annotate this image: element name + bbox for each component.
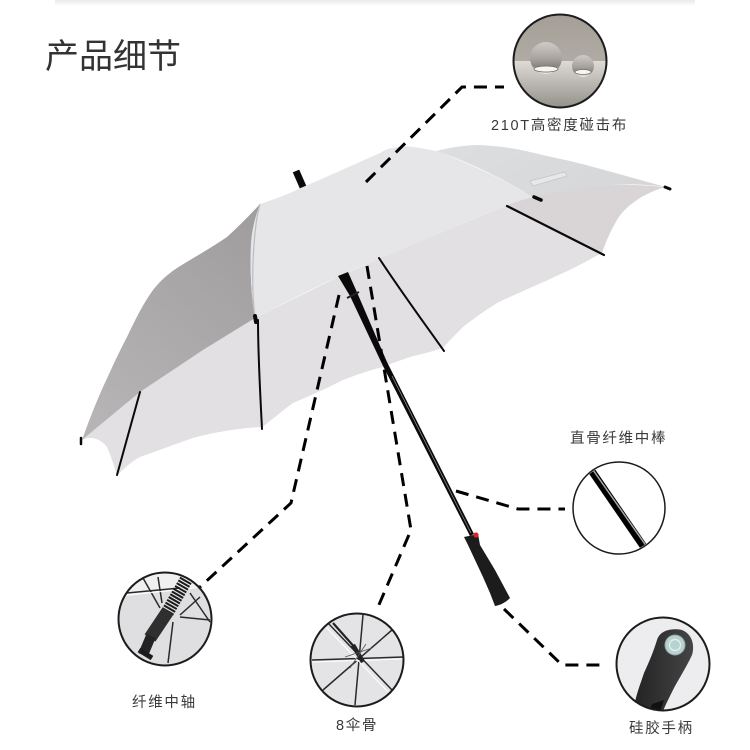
umbrella xyxy=(81,145,670,606)
detail circle: center axis xyxy=(115,570,215,670)
back panel top xyxy=(436,145,665,197)
label: eight ribs: 8伞骨 xyxy=(336,717,378,734)
top shadow band xyxy=(55,0,695,6)
label: shaft: 直骨纤维中棒 xyxy=(570,430,667,447)
title: 产品细节 xyxy=(45,38,181,76)
grip handle xyxy=(464,532,510,606)
canopy ribs xyxy=(81,187,670,475)
main front panel xyxy=(251,146,533,318)
back panel underside xyxy=(507,185,665,253)
detail circle: fiber shaft xyxy=(573,462,665,554)
top ferrule xyxy=(296,171,303,187)
seam highlight xyxy=(253,204,260,318)
dashed leader: ribs xyxy=(367,266,411,607)
center shaft xyxy=(338,272,474,536)
canopy label tag xyxy=(530,172,567,186)
detail circle: silicone grip xyxy=(615,616,711,712)
detail circle: eight ribs xyxy=(310,614,404,706)
label: center axis: 纤维中轴 xyxy=(132,694,197,711)
lower canopy underside xyxy=(82,205,602,475)
label: fabric: 210T高密度碰击布 xyxy=(491,117,628,134)
label: silicone grip: 硅胶手柄 xyxy=(629,720,694,737)
dashed leader: center axis xyxy=(200,295,339,587)
dashed leader: shaft xyxy=(456,491,565,509)
detail circle: fabric water drops xyxy=(512,14,608,108)
dashed leader: fabric xyxy=(366,87,504,182)
dark shaded panel xyxy=(82,204,260,440)
dashed leader: grip xyxy=(504,609,602,665)
